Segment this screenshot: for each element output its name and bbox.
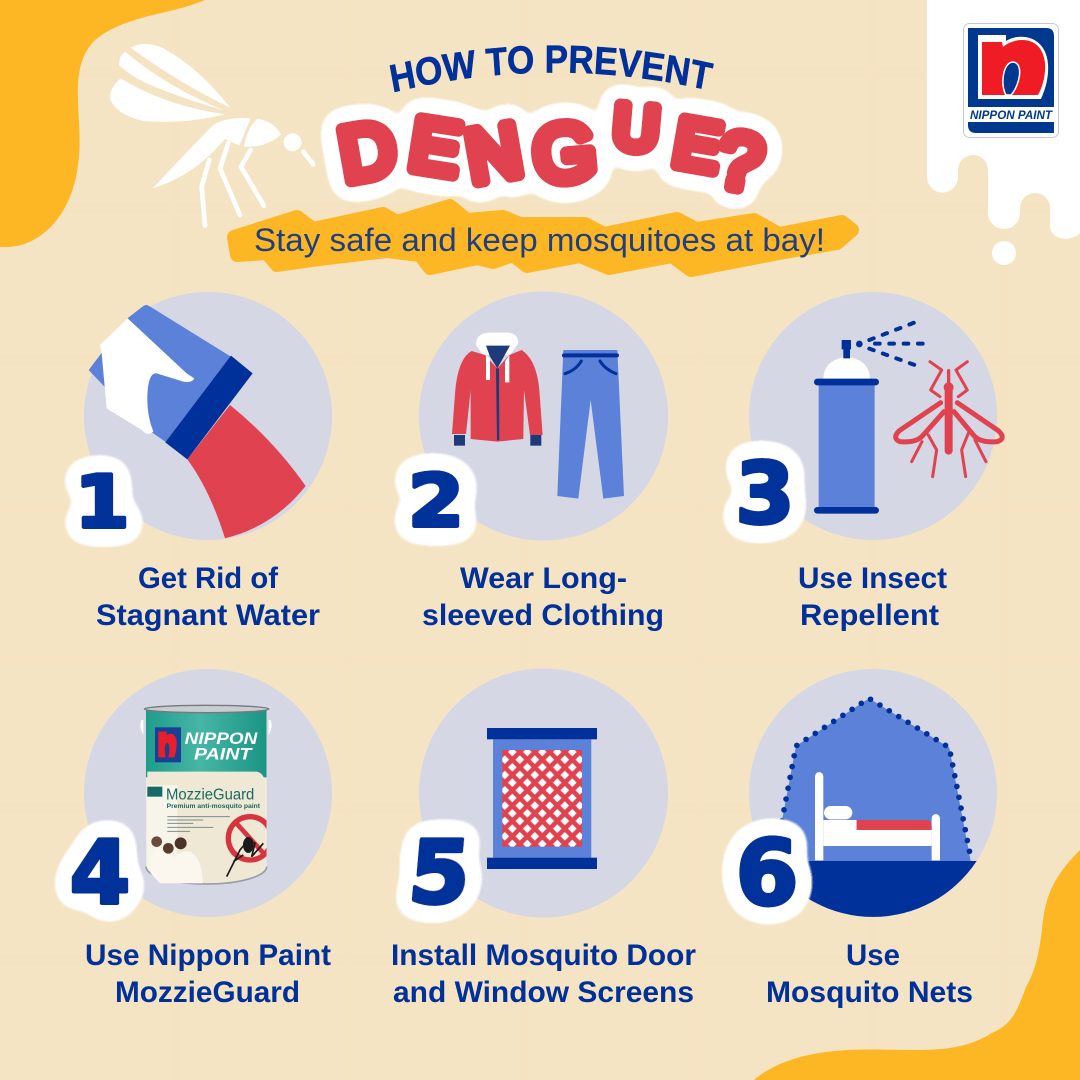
title: dengue: N: [460, 108, 527, 199]
icon: white mosquito: [110, 44, 313, 226]
icon: jacket: [452, 333, 543, 446]
label: [422, 562, 664, 632]
title: dengue: [333, 92, 769, 208]
title: dengue: E: [404, 102, 466, 192]
title: dengue: ?: [711, 114, 769, 208]
circle: [419, 292, 668, 540]
label: [798, 562, 947, 632]
number 5: 5: [405, 822, 474, 924]
number 3: 3: [735, 445, 795, 544]
label: Get Rid of: [138, 562, 279, 595]
circle: [84, 669, 332, 917]
icon: MozzieGuard paint can: PAINT: [194, 744, 253, 763]
icon: red mosquito: [896, 362, 1002, 477]
logo: Nippon Paint: NIPPON PAINT: [970, 110, 1053, 122]
yellow corner blob: top left: [0, 0, 205, 247]
circle: [749, 669, 997, 917]
label: Use Nippon Paint: [85, 939, 331, 972]
title: dengue: U: [611, 92, 661, 165]
label: Repellent: [800, 599, 939, 632]
icon: paint brush: [89, 305, 306, 538]
icon: trousers: [557, 350, 624, 499]
subtitle: Stay safe and keep mosquitoes at bay!: [254, 222, 825, 258]
panel: step 1: [74, 292, 332, 632]
panel: step 3: [735, 292, 1002, 632]
panel: step 4: [70, 669, 332, 1009]
logo: Nippon Paint: [964, 24, 1058, 138]
icon: MozzieGuard paint can: [140, 705, 272, 887]
title: dengue: G: [530, 106, 599, 200]
label: and Window Screens: [393, 976, 694, 1009]
icon: MozzieGuard paint can: Premium anti-mosquito paint: [167, 803, 261, 810]
label: [96, 562, 320, 632]
title: how to prevent: HOW TO PREVENT: [390, 45, 714, 92]
label: [85, 939, 331, 1009]
circle: [419, 668, 668, 918]
number 2: 2: [408, 460, 464, 544]
label: Stagnant Water: [96, 599, 320, 632]
yellow corner blob: bottom right: [754, 850, 1080, 1080]
label: sleeved Clothing: [422, 599, 664, 632]
label: Use Insect: [798, 562, 947, 595]
label: Install Mosquito Door: [391, 939, 696, 972]
icon: window screen: [487, 728, 597, 869]
panel: step 6: [736, 669, 997, 1009]
icon: MozzieGuard paint can: NIPPON: [185, 729, 258, 748]
number 6: 6: [736, 821, 798, 926]
icon: MozzieGuard paint can: MozzieGuard: [166, 786, 254, 803]
label: MozzieGuard: [115, 976, 300, 1009]
icon: bed under mosquito net: [769, 698, 977, 917]
icon: spray can: [814, 322, 923, 514]
circle: [749, 292, 997, 540]
label: [391, 939, 696, 1009]
number 1: 1: [74, 460, 130, 544]
label: Mosquito Nets: [766, 976, 973, 1009]
panel: step 5: [391, 668, 696, 1009]
circle: [84, 292, 332, 540]
label: Use: [846, 939, 900, 972]
label: [766, 939, 973, 1009]
white paint drip: [927, 0, 1080, 265]
panel: step 2: [408, 292, 668, 632]
label: Wear Long-: [460, 562, 627, 595]
title: dengue: E: [668, 104, 726, 187]
subtitle highlight brush: [234, 206, 852, 270]
title: dengue: D: [333, 106, 402, 199]
number 4: 4: [70, 822, 130, 924]
